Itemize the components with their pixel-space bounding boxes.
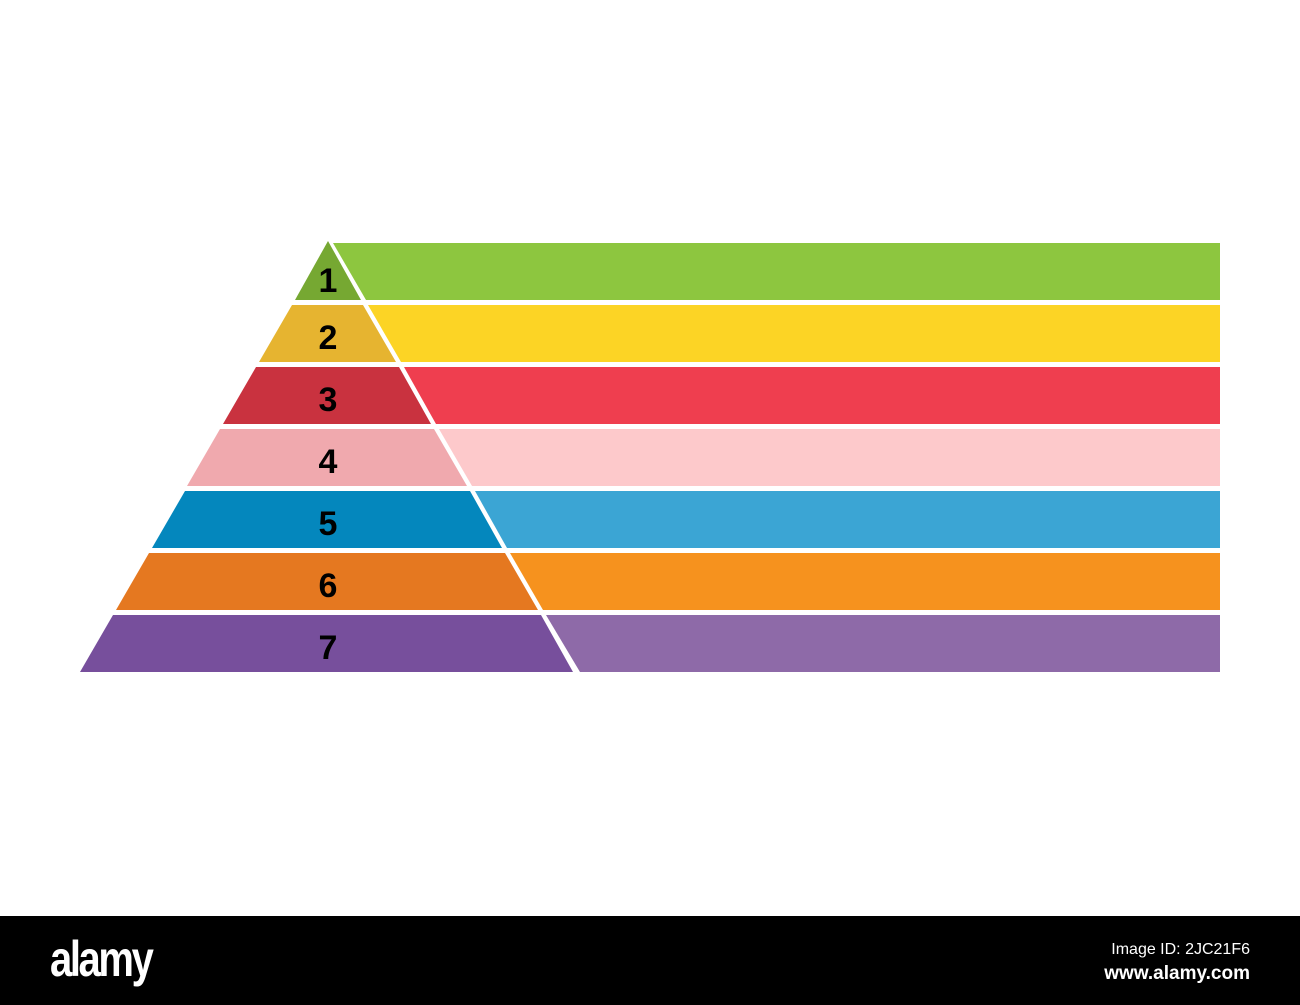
- footer bar: [0, 916, 1300, 1005]
- level 7: 7: [319, 629, 337, 667]
- level 5: 5: [319, 505, 337, 543]
- level 2: [259, 305, 1220, 362]
- level 3: 3: [319, 381, 337, 419]
- level 5: [152, 491, 1220, 548]
- level 4: [187, 429, 1220, 486]
- level 7: [80, 615, 1220, 672]
- level 6: 6: [319, 567, 337, 605]
- footer image id: Image ID: 2JC21F6: [1111, 941, 1250, 958]
- level 1: [295, 241, 1220, 300]
- footer image id: [1104, 941, 1250, 984]
- level 1: 1: [319, 262, 337, 300]
- footer image id: www.alamy.com: [1104, 963, 1250, 984]
- level 4: 4: [319, 443, 338, 481]
- level 3: [223, 367, 1220, 424]
- level 2: 2: [319, 319, 337, 357]
- level 6: [116, 553, 1220, 610]
- footer logo: alamy: [50, 931, 151, 987]
